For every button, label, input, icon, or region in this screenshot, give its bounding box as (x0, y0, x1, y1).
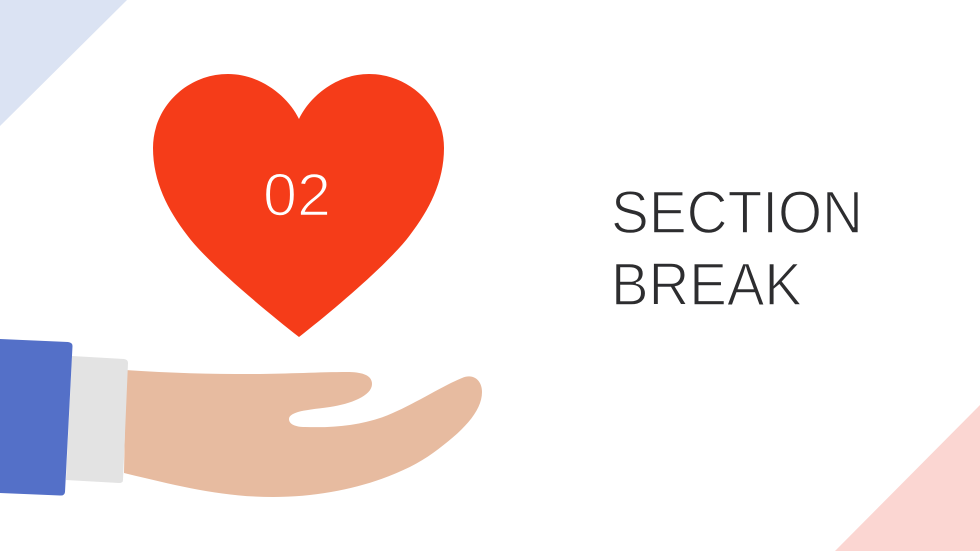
title line 2: BREAK (611, 251, 802, 318)
icon: hand (124, 370, 482, 497)
section title (611, 179, 863, 318)
section number: 02 (263, 162, 331, 228)
blue sleeve (0, 339, 72, 496)
bottom-right corner triangle (835, 405, 980, 551)
heart with section number (153, 74, 444, 337)
hand illustration (0, 339, 482, 497)
title line 1: SECTION (611, 179, 863, 246)
shirt cuff (66, 356, 128, 483)
icon: heart (153, 74, 444, 337)
top-left corner triangle (0, 0, 127, 126)
